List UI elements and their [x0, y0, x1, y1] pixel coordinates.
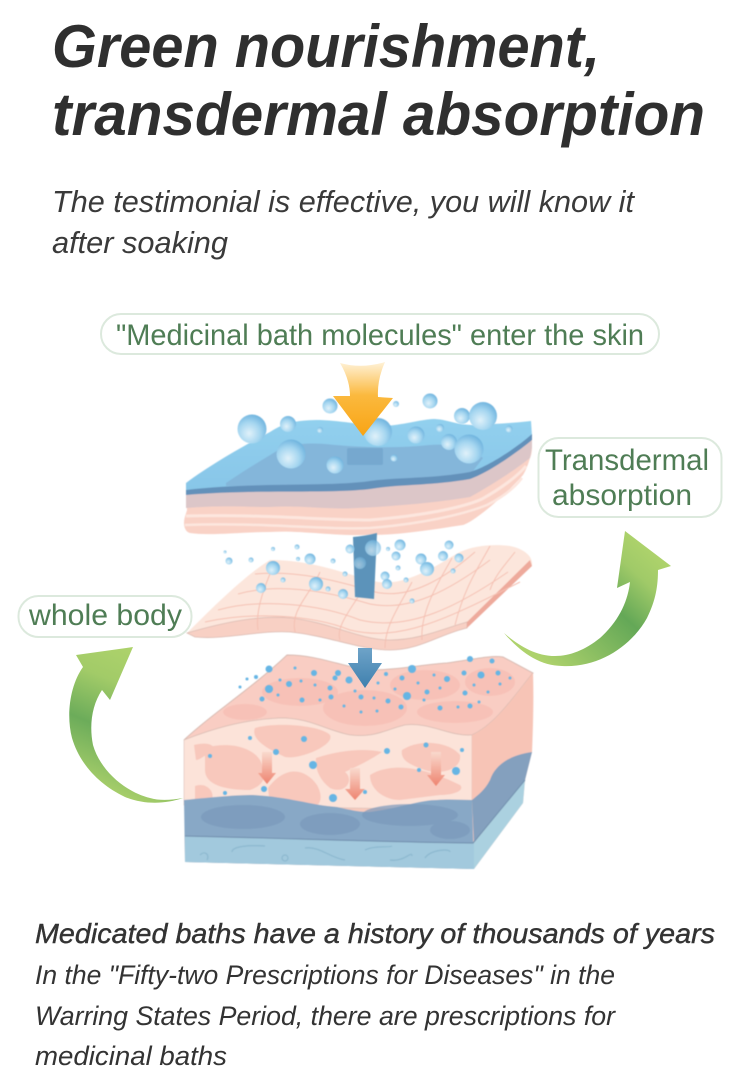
bottom text: Medicated baths have a history of thousands of years — [35, 918, 715, 949]
bottom text: Warring States Period, there are prescriptions for — [35, 1001, 616, 1031]
arrow: green curved arrow left — [69, 647, 183, 803]
illustration: molecules in the block — [208, 656, 512, 802]
illustration: middle skin sheet — [187, 545, 532, 650]
illustration: bubbles on the upper layer — [238, 394, 512, 474]
arrows: small pink arrows inside the block — [258, 752, 445, 800]
bottom text — [35, 918, 715, 1071]
arrow: green curved arrow right — [504, 531, 671, 666]
label: whole body: whole body — [28, 599, 182, 632]
subtitle: The testimonial is effective, you will know it — [52, 184, 635, 219]
icon: orange arrow pointing down — [333, 362, 393, 436]
title — [52, 13, 705, 148]
title: transdermal absorption — [52, 81, 705, 148]
arrow: blue arrow into the block — [348, 648, 382, 688]
illustration: bubbles above the sheet — [224, 540, 464, 604]
label: transdermal absorption: Transdermal — [545, 444, 709, 477]
label: transdermal absorption — [538, 438, 722, 517]
label: medicinal bath molecules: "Medicinal bath molecules" enter the skin — [116, 319, 644, 352]
illustration: upper skin layer — [184, 419, 532, 535]
title: Green nourishment, — [52, 13, 600, 80]
bottom text: medicinal baths — [35, 1041, 227, 1071]
subtitle: after soaking — [52, 225, 228, 260]
bottom text: In the "Fifty-two Prescriptions for Diseases" in the — [35, 960, 615, 990]
arrow: blue column between layers — [353, 533, 377, 599]
subtitle — [52, 184, 635, 260]
illustration: skin block — [184, 655, 533, 869]
label: transdermal absorption: absorption — [552, 479, 692, 512]
